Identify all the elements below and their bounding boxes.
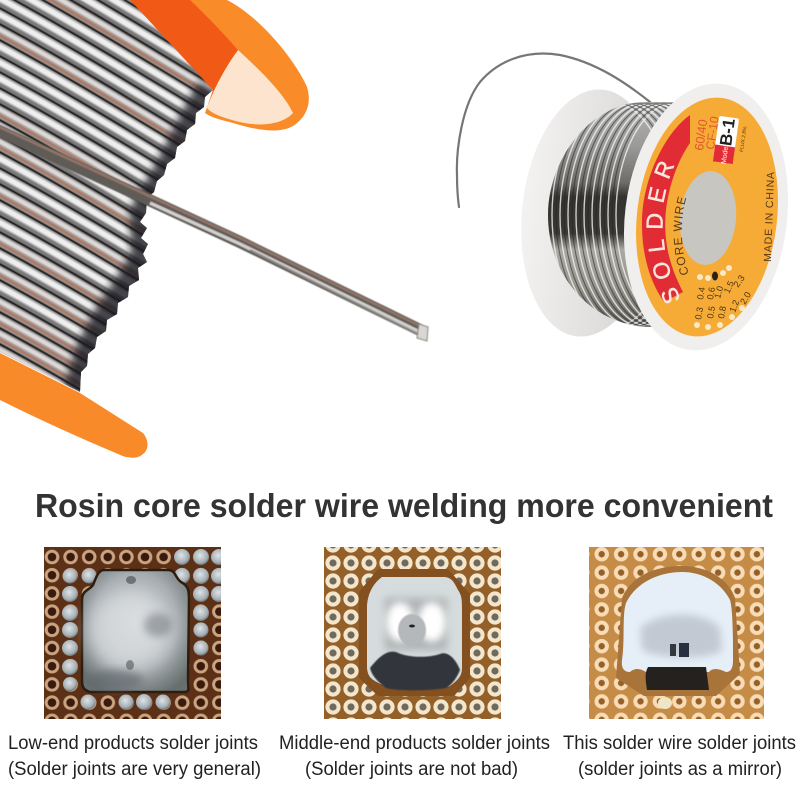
caption: middle-end products: Middle-end products solder joints: [279, 733, 550, 754]
wire size scale: 2.0: [738, 290, 753, 306]
CORE WIRE lettering: CORE WIRE: [674, 196, 688, 275]
dark component base: [646, 667, 709, 690]
wire size scale: 1.0: [712, 285, 725, 300]
caption: this solder wire: This solder wire solder joints: [563, 733, 796, 754]
photo: solder spool product: [456, 52, 788, 350]
model badge: B-1: [716, 117, 739, 147]
caption: middle-end products: (Solder joints are not bad): [305, 759, 518, 780]
SOLDER lettering: SOLDER: [646, 162, 679, 304]
solder bead: [658, 697, 672, 709]
caption: this solder wire: [563, 733, 796, 780]
wire size scale: 0.3: [693, 306, 705, 320]
dark bottom of blob: [370, 652, 460, 690]
panel: low-end solder joint photo: [44, 547, 227, 719]
wire size scale: 0.5: [705, 305, 717, 319]
wire size scale: 0.4: [695, 286, 707, 300]
back flange: [509, 83, 671, 343]
model badge: Model: [721, 144, 730, 165]
panel: this solder wire joint photo: [589, 547, 764, 719]
wire end: [0, 125, 428, 341]
solder blob: [367, 577, 462, 689]
mirror solder blob: [622, 572, 733, 672]
wire size scale: 1.5: [722, 279, 736, 295]
wire size scale: 2.3: [731, 273, 747, 289]
top orange flange: [123, 0, 309, 131]
reflection: [640, 614, 722, 658]
flux code text: CF-10: [703, 115, 722, 150]
title: Rosin core solder wire welding more convenient: [35, 487, 773, 524]
blob highlights and stains: [87, 576, 172, 690]
solder balls: [62, 549, 227, 710]
front flange: [609, 74, 800, 360]
scorched halo: [616, 566, 740, 696]
caption: low-end products: [8, 733, 261, 780]
scorched halo: [359, 569, 470, 696]
model badge: [713, 116, 739, 165]
caption: low-end products: Low-end products solder joints: [8, 733, 258, 754]
caption: this solder wire: (solder joints as a mirror): [578, 759, 782, 780]
spool label: [636, 98, 778, 336]
alloy text: 60/40: [692, 118, 710, 151]
wire size scale: 0.6: [705, 286, 717, 300]
made in china: MADE IN CHINA: [762, 172, 777, 262]
flux percentage: FLUX 2.8%: [739, 126, 749, 152]
bottom orange flange: [0, 353, 148, 458]
photo: close-up of solder spool: [0, 0, 430, 458]
mirror highlight: [385, 598, 447, 650]
wire size scale: 0.8: [716, 305, 728, 319]
free wire: [457, 54, 650, 207]
caption: low-end products: (Solder joints are very general): [8, 759, 261, 780]
wire size dots: [694, 265, 745, 330]
wire size scale: [693, 273, 753, 320]
wound wire body: [548, 102, 674, 327]
wire size scale: 1.2: [727, 299, 741, 314]
center hole: [676, 169, 740, 267]
solder blob: [82, 570, 189, 692]
panel: middle-end solder joint photo: [324, 547, 501, 719]
caption: middle-end products: [279, 733, 550, 780]
wire coils: [0, 0, 213, 392]
red banner: [642, 115, 690, 302]
